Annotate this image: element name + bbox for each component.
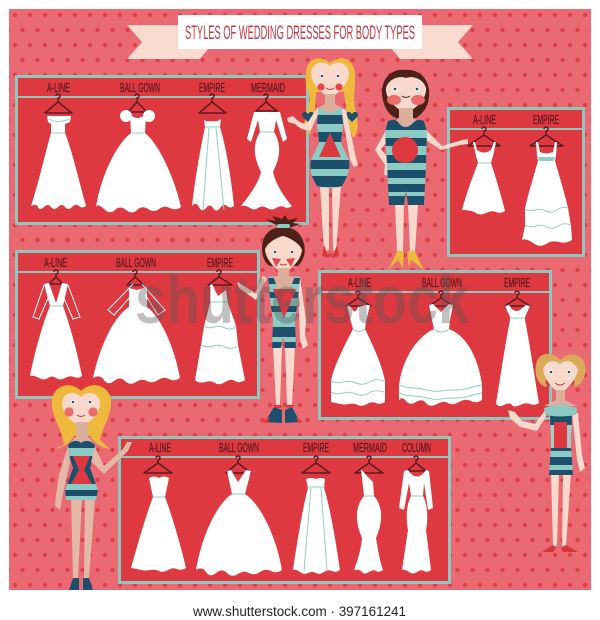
- legs and shoes: [320, 186, 341, 252]
- dress: ball gown with lace sleeves: [93, 270, 180, 384]
- legs and shoes: [551, 473, 571, 546]
- label: Mermaid: MERMAID: [353, 441, 387, 455]
- face: [62, 393, 100, 426]
- label: Empire: EMPIRE: [504, 276, 530, 290]
- dress: A-line V-neck long sleeves: [30, 270, 82, 380]
- label: Empire: EMPIRE: [199, 81, 225, 95]
- arms: [375, 128, 468, 176]
- arms: [508, 410, 585, 472]
- dress: Mermaid one shoulder: [354, 456, 383, 574]
- panel: top left dresses: [16, 76, 308, 224]
- hair: [382, 70, 429, 118]
- dress: ball gown tiered: [399, 291, 482, 406]
- dress: A-line strapless: [131, 456, 186, 572]
- label: A-line: A-LINE: [473, 113, 496, 127]
- dress stripes: [310, 108, 350, 188]
- hair: [303, 58, 358, 138]
- label: Ball gown: BALL GOWN: [116, 256, 156, 270]
- title banner: [127, 15, 473, 59]
- label: A-line: A-LINE: [44, 256, 67, 270]
- dress stripes: [65, 440, 98, 500]
- panel: top right dresses: [448, 108, 584, 256]
- legs and shoes: [71, 498, 95, 578]
- dress: ball gown puff sleeves: [96, 94, 181, 212]
- dress: A-line straps: [462, 127, 505, 214]
- label: Empire: EMPIRE: [303, 441, 329, 455]
- dress stripes: [549, 416, 573, 475]
- label: Column: COLUMN: [402, 441, 431, 455]
- figure: blonde braids, triangle body: [287, 58, 358, 258]
- dress: Empire tiered: [522, 127, 572, 246]
- face: [543, 361, 578, 393]
- face: [311, 63, 349, 98]
- dress: Empire with train: [293, 456, 340, 574]
- dress: Column long sleeves: [399, 456, 433, 574]
- dress: Empire sweetheart: [496, 291, 539, 406]
- face: [386, 77, 426, 113]
- label: A-line: A-LINE: [149, 441, 171, 455]
- dress: A-line off shoulder: [31, 94, 86, 209]
- label: Empire: EMPIRE: [207, 256, 233, 270]
- figure: brunette, circle body: [375, 70, 468, 270]
- dress: Empire tiered: [195, 270, 245, 384]
- figure: curly hair, rectangle body: [508, 354, 586, 552]
- hair: [262, 215, 305, 266]
- dress stripes: [268, 276, 300, 348]
- dress: Empire: [192, 94, 234, 210]
- figure: blonde hourglass body: [52, 385, 132, 590]
- label: Mermaid: MERMAID: [251, 81, 285, 95]
- label: Ball gown: BALL GOWN: [219, 441, 259, 455]
- label: Ball gown: BALL GOWN: [422, 276, 462, 290]
- face: [265, 236, 302, 273]
- label: A-line: A-LINE: [348, 276, 371, 290]
- dress: ball gown wide straps: [196, 456, 282, 576]
- arms: [55, 442, 132, 510]
- legs and shoes: [273, 346, 295, 405]
- label: Empire: EMPIRE: [533, 113, 559, 127]
- footer stock id: www.shutterstock.com · 397161241: [192, 604, 406, 619]
- panel: middle left dresses: [16, 252, 259, 398]
- panel: bottom dresses: [119, 438, 450, 582]
- hair: [52, 385, 111, 449]
- arms: [287, 108, 358, 167]
- hair: [535, 354, 586, 387]
- dress: A-line tiered: [331, 291, 385, 406]
- watermark: shutterstock: [135, 262, 469, 338]
- dress: Mermaid long sleeves: [241, 94, 292, 210]
- arms: [237, 276, 308, 349]
- dress stripes: [385, 120, 427, 205]
- label: A-line: A-LINE: [47, 81, 70, 95]
- panel: middle right dresses: [320, 272, 551, 418]
- label: Ball gown: BALL GOWN: [120, 81, 160, 95]
- figure: bun hair, inverted triangle body: [237, 215, 308, 423]
- legs and shoes: [395, 204, 418, 252]
